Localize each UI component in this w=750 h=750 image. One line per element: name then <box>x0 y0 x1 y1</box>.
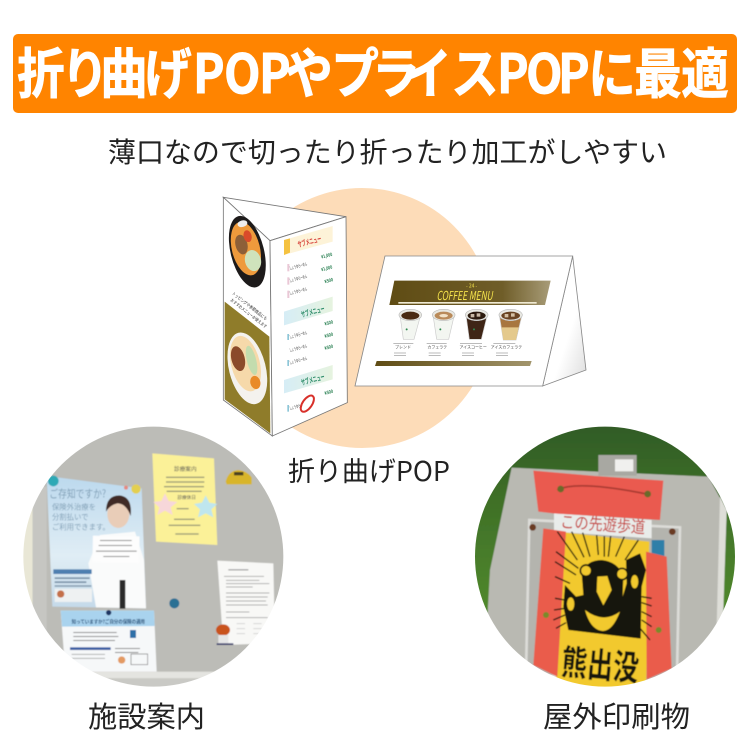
blue poster: ご利用できます。 <box>52 521 110 532</box>
label: folding POP: 折り曲げPOP <box>288 450 450 489</box>
menu rows 1: ¥1,000 <box>321 252 333 261</box>
menu rows 2: ¥500 <box>324 320 334 328</box>
photo: bear warning sign <box>470 420 740 691</box>
small caption: おすすめメニューが使えます <box>229 297 269 330</box>
menu rows 3: ¥500 <box>324 389 334 397</box>
yellow notice: 診療休日 <box>177 494 196 501</box>
photo: facility notice board <box>20 420 290 692</box>
cup: iced coffee: アイスコーヒー <box>459 345 487 351</box>
sign text: bear warning: 熊出没 <box>560 634 641 691</box>
front panel <box>355 256 573 386</box>
cup: cafe latte <box>427 309 455 356</box>
subtitle: 薄口なので切ったり折ったり加工がしやすい <box>108 131 667 171</box>
menu header band: COFFEE MENU <box>437 286 493 304</box>
tent card POP: coffee menu <box>355 256 586 386</box>
menu rows 3 <box>287 389 334 414</box>
menu rows 1: ¥1,000 <box>321 264 333 273</box>
menu band 3: サブメニュー <box>300 371 326 388</box>
menu rows 2: しょうゆらーめん <box>289 330 308 341</box>
blue poster: 分割払いで <box>52 511 88 522</box>
menu rows 1 <box>287 252 334 298</box>
menu band 2: サブメニュー <box>300 303 326 320</box>
blue poster: 保険外治療を <box>52 501 96 512</box>
ramen bowl bottom <box>221 328 274 408</box>
yellow notice <box>152 453 217 545</box>
cup: cafe latte: カフェラテ <box>427 344 447 351</box>
menu rows 1: しょうゆらーめん <box>289 286 308 297</box>
menu band 3 <box>284 365 333 393</box>
blue flyer <box>61 611 157 672</box>
triangular table POP <box>221 197 347 436</box>
menu band 2 <box>284 297 333 325</box>
menu rows 2: しょうゆらーめん <box>289 356 308 366</box>
title banner: 折り曲げPOPやプライスPOPに最適 <box>17 30 729 109</box>
right face: menu <box>270 217 347 436</box>
peach background circle <box>232 188 492 448</box>
sign back plate <box>526 520 680 690</box>
menu rows 1: ¥500 <box>324 277 334 285</box>
cup: iced coffee <box>459 309 488 356</box>
menu rows 1: しょうゆらーめん <box>289 274 308 284</box>
label: outdoor printing: 屋外印刷物 <box>543 694 690 736</box>
blue poster <box>47 476 146 609</box>
white strip with text: この先遊歩道 <box>560 508 646 538</box>
sunburst rays <box>553 532 652 640</box>
magnets <box>48 470 252 645</box>
small caption: トッピングや季節商品にも <box>230 290 269 322</box>
menu rows 2 <box>287 320 334 366</box>
label: facility guide: 施設案内 <box>88 694 205 736</box>
menu rows 1: しょうゆらーめん <box>289 261 308 272</box>
menu bottom strip <box>375 361 532 366</box>
cup: blend: ブレンド <box>395 344 411 351</box>
menu rows 3: しょうゆらーめん <box>289 401 308 412</box>
yellow notice: 診療案内 <box>174 464 197 473</box>
back panel <box>543 256 586 386</box>
blue poster: ご存知ですか? <box>49 486 106 501</box>
ramen bowl top <box>222 212 272 291</box>
blue flyer: 知っていますか?ご自分の保険の適用 <box>72 618 145 625</box>
cup: blend <box>393 309 422 356</box>
menu rows 2: しょうゆらーめん <box>289 343 308 354</box>
left face <box>221 197 274 436</box>
menu band 1: サブメニュー <box>297 233 323 250</box>
yellow sign <box>556 532 649 690</box>
red tape <box>533 471 663 520</box>
cup: iced cafe latte: アイスカフェラテ <box>491 344 522 351</box>
white notice <box>217 561 275 645</box>
menu header band <box>389 281 551 305</box>
menu rows 2: ¥500 <box>324 332 334 340</box>
cup: iced cafe latte <box>491 309 522 356</box>
menu header band: - 24 - <box>466 282 478 289</box>
bear illustration <box>563 553 646 639</box>
menu band 1 <box>284 226 333 255</box>
top opening <box>223 197 346 241</box>
menu rows 2: ¥500 <box>324 344 334 352</box>
